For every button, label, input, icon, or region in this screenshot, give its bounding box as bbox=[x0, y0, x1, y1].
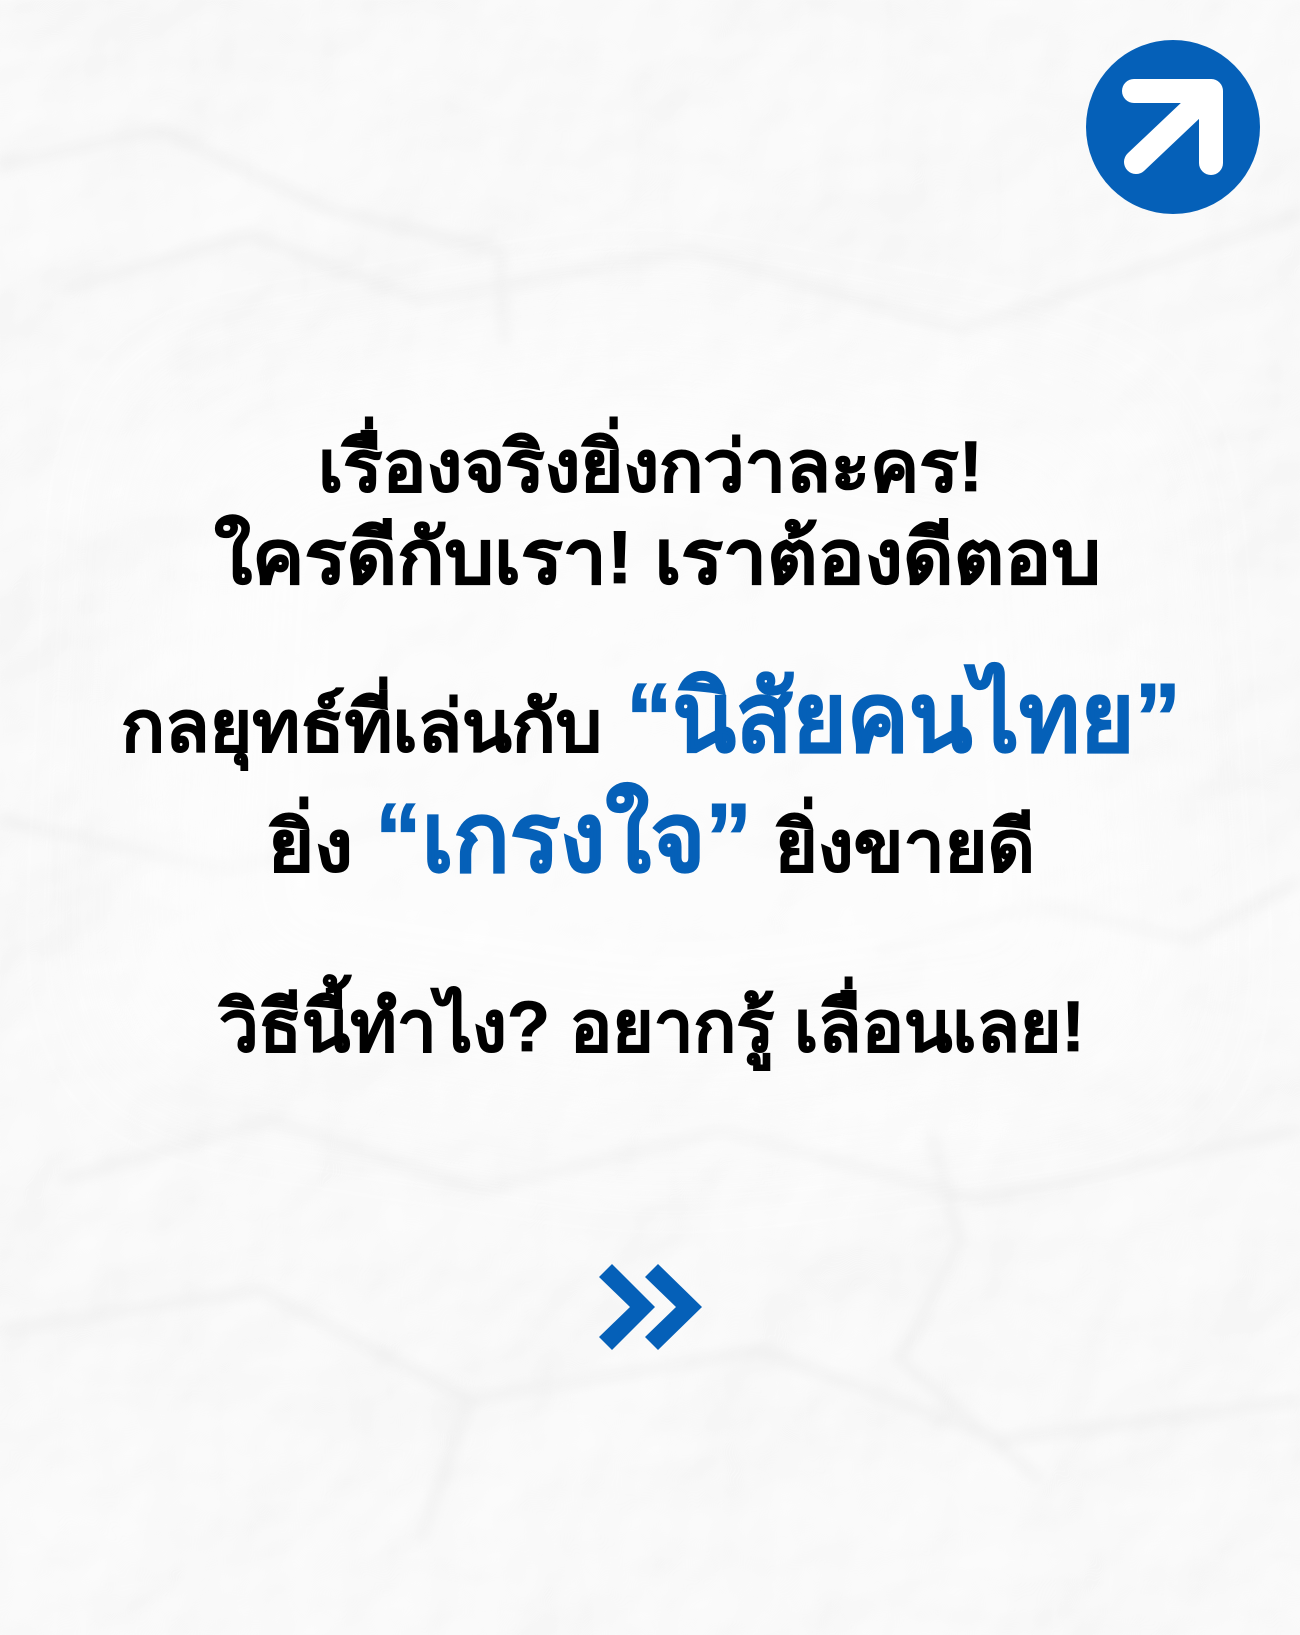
highlighted statement: Thai habits strategy: ยิ่ง bbox=[268, 796, 353, 887]
highlighted statement: Thai habits strategy: ยิ่งขายดี bbox=[775, 796, 1035, 887]
headline: first statement: เรื่องจริงยิ่งกว่าละคร! bbox=[318, 416, 983, 507]
headline: first statement: ใครดีกับเรา! เราต้องดีตอบ bbox=[214, 514, 1101, 599]
highlighted statement: Thai habits strategy bbox=[121, 662, 1181, 892]
highlighted statement: Thai habits strategy: “เกรงใจ” bbox=[375, 783, 752, 892]
headline: first statement bbox=[214, 416, 1101, 599]
call to action text: วิธีนี้ทำไง? อยากรู้ เลื่อนเลย! bbox=[218, 974, 1085, 1071]
highlighted statement: Thai habits strategy: “นิสัยคนไทย” bbox=[626, 662, 1181, 772]
icon: double chevron swipe arrow bbox=[599, 1264, 702, 1350]
logo: blue circle with arrow bbox=[1086, 40, 1260, 214]
highlighted statement: Thai habits strategy: กลยุทธ์ที่เล่นกับ bbox=[121, 676, 602, 771]
